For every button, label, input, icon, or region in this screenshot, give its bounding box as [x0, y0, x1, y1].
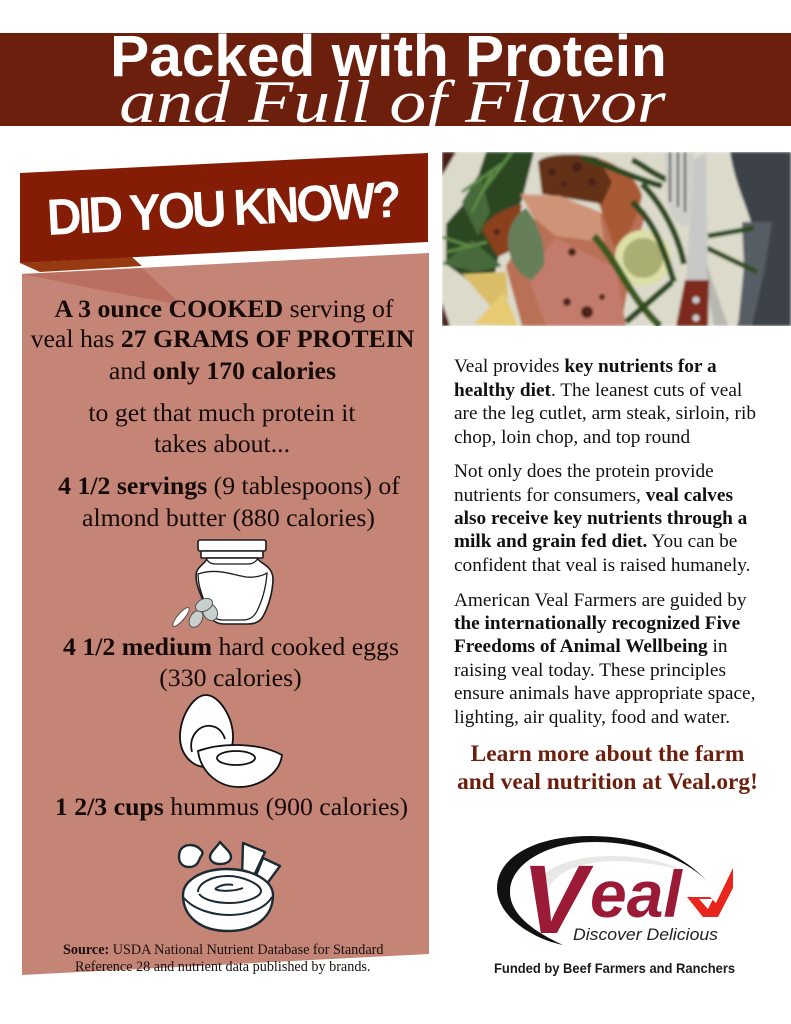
text: calves — [454, 461, 750, 576]
text: five freedoms: raising veal today. These principles — [454, 660, 726, 681]
text: key nutrients: are the leg cutlet, arm steak, sirloin, rib — [454, 403, 756, 424]
logo: Veal — [497, 836, 733, 950]
text: eggs — [63, 632, 399, 692]
text: veal protein fact: veal has 27 GRAMS OF PROTEIN — [31, 324, 414, 353]
source note — [63, 942, 384, 975]
text: key nutrients: chop, loin chop, and top round — [454, 427, 690, 448]
text: veal protein fact — [30, 294, 414, 385]
text: to get that much: to get that much protein it — [88, 398, 356, 427]
text: hummus: 1 2/3 cups hummus (900 calories) — [55, 792, 408, 821]
text: calves: Not only does the protein provide — [454, 461, 714, 482]
text: key nutrients — [454, 356, 756, 448]
text: five freedoms — [454, 590, 755, 728]
text: calves: milk and grain fed diet. You can be — [454, 531, 737, 552]
photo: veal plate — [442, 152, 791, 326]
logo: Veal: eal — [590, 857, 683, 931]
funding line: Funded by Beef Farmers and Ranchers — [494, 960, 735, 976]
text: almond butter: almond butter (880 calories) — [82, 503, 375, 532]
call to action: Learn more about the farm — [471, 741, 744, 767]
text: five freedoms: the internationally recognized Five — [454, 613, 740, 634]
text: to get that much: takes about... — [154, 429, 290, 458]
text: eggs: 4 1/2 medium hard cooked eggs — [63, 632, 399, 661]
source note: Reference 28 and nutrient data published by brands. — [75, 959, 370, 975]
text: five freedoms: lighting, air quality, food and water. — [454, 707, 730, 728]
text: almond butter — [58, 471, 400, 532]
call to action — [457, 741, 758, 795]
text: to get that much — [88, 398, 356, 458]
text: calves: nutrients for consumers, veal calves — [454, 485, 733, 506]
call to action: and veal nutrition at Veal.org! — [457, 769, 758, 795]
text: veal protein fact: A 3 ounce COOKED serving of — [55, 294, 393, 323]
ribbon heading: DID YOU KNOW? — [46, 171, 400, 246]
text: key nutrients: Veal provides key nutrients for a — [454, 356, 717, 377]
text: five freedoms: Freedoms of Animal Wellbeing in — [454, 636, 728, 657]
text: calves: confident that veal is raised humanely. — [454, 555, 750, 576]
header banner — [0, 33, 791, 126]
icon: hummus bowl — [178, 840, 282, 932]
logo: Veal: Discover Delicious — [573, 925, 719, 944]
icon: almond butter jar — [172, 539, 274, 628]
text: almond butter: 4 1/2 servings (9 tablespoons) of — [58, 471, 400, 500]
icon: hard cooked eggs — [179, 694, 283, 788]
text: key nutrients: healthy diet. The leanest cuts of veal — [454, 380, 742, 401]
text: calves: also receive key nutrients through a — [454, 508, 747, 529]
text: eggs: (330 calories) — [159, 663, 302, 692]
text: five freedoms: ensure animals have appropriate space, — [454, 683, 755, 704]
text: five freedoms: American Veal Farmers are guided by — [454, 590, 747, 611]
source note: Source: USDA National Nutrient Database for Standard — [63, 942, 383, 958]
text: veal protein fact: and only 170 calories — [109, 356, 336, 385]
